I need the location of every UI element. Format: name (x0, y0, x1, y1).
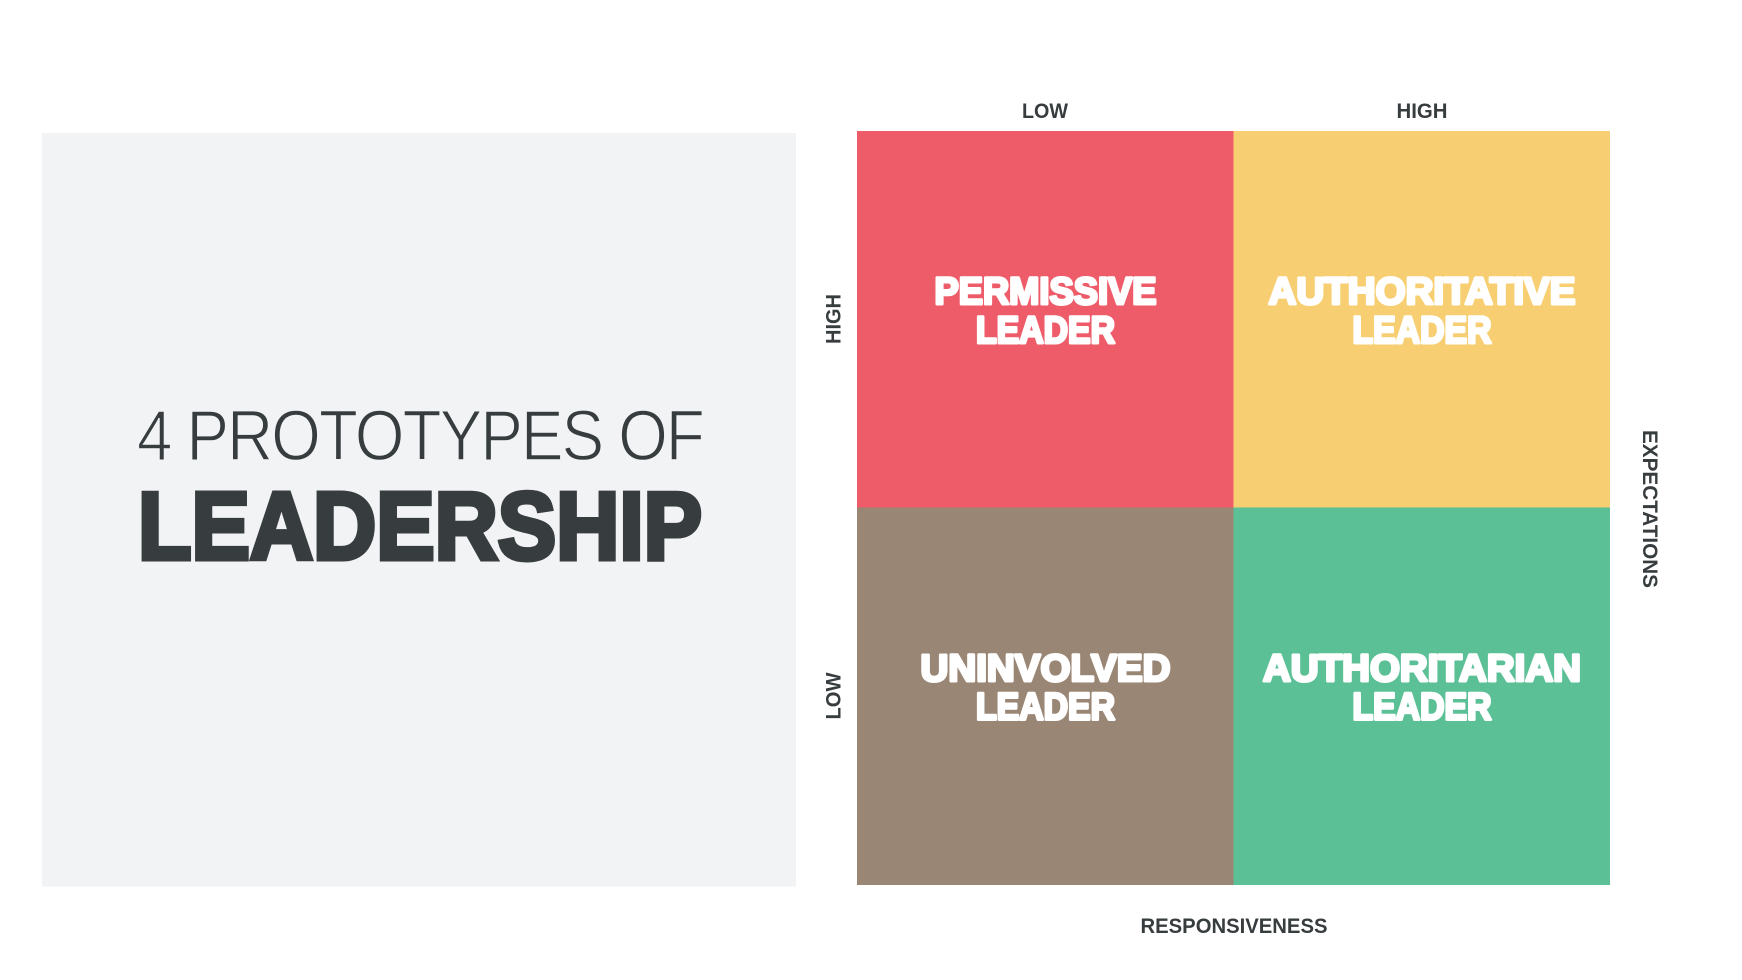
panel: title background (42, 133, 796, 886)
axis title: responsiveness: RESPONSIVENESS (1140, 915, 1328, 938)
quadrant: authoritarian leader (1234, 508, 1610, 885)
quadrant: uninvolved leader: UNINVOLVED (920, 648, 1170, 690)
quadrant: authoritarian leader: AUTHORITARIAN (1263, 648, 1581, 690)
quadrant: permissive leader (857, 131, 1234, 508)
quadrant: permissive leader: PERMISSIVE (934, 271, 1156, 313)
axis title: expectations: EXPECTATIONS (1638, 430, 1661, 588)
matrix chart (857, 131, 1610, 885)
axis label: responsiveness high: HIGH (1396, 100, 1448, 123)
axis label: responsiveness low: LOW (1022, 100, 1068, 123)
quadrant: uninvolved leader (857, 508, 1234, 885)
quadrant: authoritative leader: LEADER (1352, 310, 1492, 352)
title (137, 397, 703, 580)
axis label: expectations high: HIGH (822, 294, 846, 344)
title line 1: 4 PROTOTYPES OF (137, 397, 703, 476)
quadrant: permissive leader: LEADER (976, 310, 1115, 352)
quadrant: uninvolved leader: LEADER (976, 686, 1115, 728)
quadrant: authoritative leader: AUTHORITATIVE (1268, 271, 1576, 313)
quadrant: authoritarian leader: LEADER (1352, 686, 1492, 728)
title line 2: LEADERSHIP (138, 473, 702, 580)
quadrant: authoritative leader (1234, 131, 1610, 508)
axis label: expectations low: LOW (822, 672, 846, 720)
